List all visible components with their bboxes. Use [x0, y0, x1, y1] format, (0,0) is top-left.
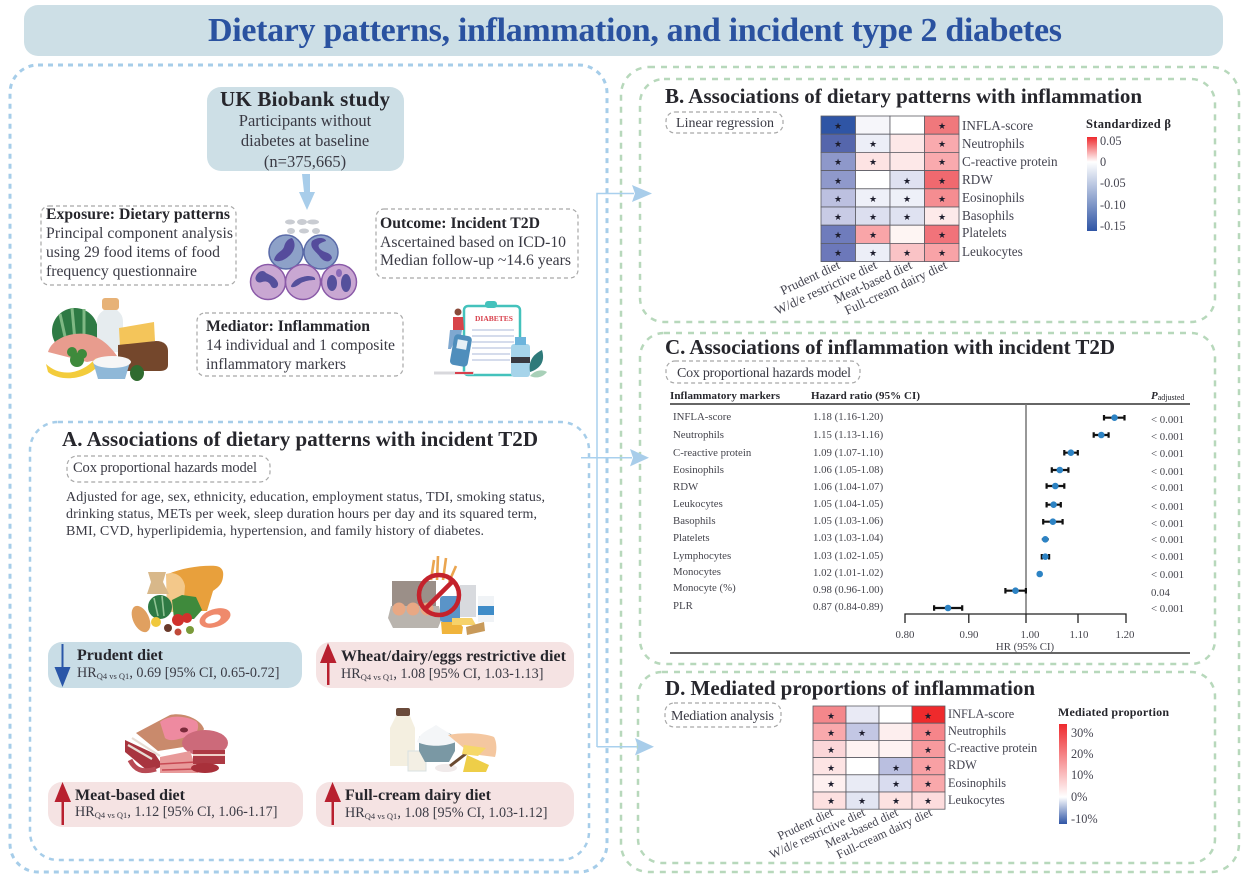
legend: mediated proportion: 0% — [1071, 790, 1087, 804]
icon: meat — [125, 714, 228, 773]
outcome box — [376, 209, 578, 278]
heatmap: mediated proportion: ★ — [924, 763, 932, 773]
marker names: Monocyte (%) — [673, 582, 736, 594]
x axis: 0.80 — [896, 629, 914, 641]
UK Biobank study box: Participants without — [239, 111, 372, 130]
heatmap: standardized beta: ★ — [903, 212, 911, 222]
heatmap: standardized beta: ★ — [834, 157, 842, 167]
model tag: Cox proportional hazards — [666, 361, 860, 383]
legend: standardized beta: 0.05 — [1100, 134, 1122, 148]
heatmap: standardized beta: ★ — [938, 248, 946, 258]
panel: study design — [10, 65, 607, 872]
legend: standardized beta: -0.15 — [1100, 219, 1126, 233]
heatmap: mediated proportion: Prudent diet — [775, 805, 836, 843]
exposure box: using 29 food items of food — [46, 244, 220, 261]
box: prudent diet: HR — [77, 665, 97, 681]
icon: full-cream dairy — [390, 708, 496, 772]
mediator box — [197, 313, 403, 376]
heatmap: standardized beta: ★ — [834, 194, 842, 204]
heatmap: mediated proportion: ★ — [858, 796, 866, 806]
heatmap: standardized beta: ★ — [834, 248, 842, 258]
box: meat-based diet — [48, 782, 303, 827]
heatmap: standardized beta: ★ — [938, 157, 946, 167]
heatmap: standardized beta: INFLA-score — [962, 118, 1033, 133]
UK Biobank study box — [207, 87, 404, 171]
adjusted p values: < 0.001 — [1151, 518, 1184, 530]
model tag: Cox proportional hazards: Cox proportional hazards model — [73, 460, 257, 476]
mediator box: 14 individual and 1 composite — [206, 337, 395, 354]
box: wheat dairy eggs restrictive diet: Wheat/dairy/eggs restrictive diet — [341, 648, 567, 665]
heatmap: mediated proportion: ★ — [827, 745, 835, 755]
marker names: PLR — [673, 600, 694, 612]
heatmap: standardized beta: ★ — [869, 230, 877, 240]
heatmap: standardized beta: Eosinophils — [962, 190, 1024, 205]
heatmap: standardized beta: ★ — [938, 194, 946, 204]
mediator box: Mediator: Inflammation — [206, 318, 370, 335]
adjusted p values: < 0.001 — [1151, 551, 1184, 563]
heatmap: mediated proportion: INFLA-score — [948, 707, 1015, 721]
marker names: C-reactive protein — [673, 447, 752, 459]
forest plot: adjusted — [1158, 393, 1184, 402]
heatmap: standardized beta: Prudent diet — [778, 257, 843, 298]
marker names: Eosinophils — [673, 464, 724, 476]
box: meat-based diet: Q4 vs Q1 — [95, 810, 127, 820]
icon: diabetes clipboard: DIABETES — [475, 314, 513, 323]
icon: restricted wheat dairy eggs with prohibition sign — [388, 556, 494, 635]
heatmap: mediated proportion: ★ — [924, 779, 932, 789]
hazard ratios: 1.03 (1.03-1.04) — [813, 532, 884, 544]
covariate adjustment text: drinking status, METs per week, sleep duration hours per day and its squared term, — [66, 507, 537, 522]
box: wheat dairy eggs restrictive diet: HR — [341, 666, 361, 682]
hazard ratios: 0.98 (0.96-1.00) — [813, 584, 884, 596]
heatmap: standardized beta: ★ — [938, 212, 946, 222]
heatmap: mediated proportion — [767, 706, 1037, 862]
model tag: linear regression — [666, 112, 783, 133]
heatmap: standardized beta: ★ — [834, 121, 842, 131]
box: wheat dairy eggs restrictive diet — [316, 642, 574, 688]
adjusted p values: < 0.001 — [1151, 448, 1184, 460]
heatmap: mediated proportion: ★ — [924, 711, 932, 721]
heatmap: standardized beta: Platelets — [962, 225, 1007, 240]
confidence intervals and point estimates — [934, 414, 1124, 611]
heatmap: mediated proportion: W/d/e restrictive diet — [767, 805, 868, 862]
legend: mediated proportion — [1058, 705, 1169, 826]
forest plot — [670, 390, 1190, 653]
mediator box: inflammatory markers — [206, 356, 346, 373]
hazard ratios: 1.09 (1.07-1.10) — [813, 447, 884, 459]
heatmap: standardized beta: ★ — [938, 139, 946, 149]
panel D: mediated proportions of inflammation — [638, 672, 1215, 863]
heatmap: standardized beta: Full-cream dairy diet — [842, 257, 950, 318]
legend: standardized beta: 0 — [1100, 155, 1106, 169]
marker names: Basophils — [673, 515, 716, 527]
marker names: Neutrophils — [673, 429, 724, 441]
heatmap: mediated proportion: Meat-based diet — [823, 805, 901, 851]
adjusted p values: < 0.001 — [1151, 466, 1184, 478]
outer frame: results panels — [621, 67, 1239, 872]
outcome box: Ascertained based on ICD-10 — [380, 234, 566, 251]
adjusted p values: < 0.001 — [1151, 569, 1184, 581]
heatmap: standardized beta: Leukocytes — [962, 244, 1023, 259]
box: wheat dairy eggs restrictive diet: Q4 vs Q1 — [361, 672, 393, 682]
heatmap: standardized beta: ★ — [903, 194, 911, 204]
heatmap: mediated proportion: ★ — [892, 796, 900, 806]
heatmap: standardized beta: ★ — [869, 194, 877, 204]
panel A: dietary patterns with incident T2D — [30, 422, 589, 860]
arrow: increased risk — [324, 782, 341, 825]
adjusted p values: 0.04 — [1151, 587, 1170, 599]
adjusted p values: < 0.001 — [1151, 534, 1184, 546]
covariate adjustment text: Adjusted for age, sex, ethnicity, education, employment status, TDI, smoking status, — [66, 490, 545, 505]
heatmap: standardized beta: ★ — [938, 230, 946, 240]
model tag: Cox proportional hazards — [67, 456, 270, 482]
heatmap: mediated proportion: ★ — [892, 779, 900, 789]
heatmap: standardized beta: C-reactive protein — [962, 154, 1058, 169]
legend: mediated proportion: Mediated proportion — [1058, 705, 1169, 719]
heatmap: mediated proportion: ★ — [827, 779, 835, 789]
heatmap: standardized beta: Basophils — [962, 208, 1014, 223]
exposure box: Principal component analysis — [46, 225, 233, 242]
adjusted p values: < 0.001 — [1151, 603, 1184, 615]
hazard ratios — [813, 411, 884, 613]
heatmap: standardized beta: Neutrophils — [962, 136, 1024, 151]
title banner: Dietary patterns, inflammation, and incident type 2 diabetes — [208, 12, 1062, 49]
heatmap: standardized beta: RDW — [962, 172, 993, 187]
marker names: Platelets — [673, 532, 710, 544]
heatmap: standardized beta: ★ — [938, 176, 946, 186]
legend: mediated proportion: 30% — [1071, 726, 1094, 740]
heatmap: mediated proportion: Neutrophils — [948, 724, 1006, 738]
box: full-cream dairy diet: HR — [345, 805, 365, 821]
heatmap: standardized beta: ★ — [834, 212, 842, 222]
icon: inflammatory blood cells — [250, 219, 356, 300]
heatmap: standardized beta: ★ — [869, 212, 877, 222]
heading C: C. Associations of inflammation with incident T2D — [665, 335, 1115, 359]
icon: diabetes clipboard — [434, 301, 547, 377]
hazard ratios: 0.87 (0.84-0.89) — [813, 601, 884, 613]
heatmap: standardized beta: ★ — [869, 157, 877, 167]
box: full-cream dairy diet: , 1.08 [95% CI, 1.03-1.12] — [397, 805, 547, 821]
heading D: D. Mediated proportions of inflammation — [665, 676, 1035, 700]
exposure box: frequency questionnaire — [46, 263, 197, 280]
adjusted p values — [1151, 414, 1184, 615]
x axis: 1.00 — [1021, 629, 1039, 641]
box: meat-based diet: , 1.12 [95% CI, 1.06-1.17] — [127, 804, 277, 820]
box: full-cream dairy diet: Full-cream dairy diet — [345, 787, 492, 804]
marker names: RDW — [673, 481, 699, 493]
adjusted p values: < 0.001 — [1151, 501, 1184, 513]
x axis — [896, 614, 1134, 653]
heatmap: standardized beta: ★ — [834, 139, 842, 149]
box: prudent diet: Prudent diet — [77, 647, 164, 664]
heatmap: mediated proportion: RDW — [948, 758, 977, 772]
hazard ratios: 1.15 (1.13-1.16) — [813, 429, 884, 441]
hazard ratios: 1.06 (1.04-1.07) — [813, 481, 884, 493]
hazard ratios: 1.18 (1.16-1.20) — [813, 411, 884, 423]
forest plot: Inflammatory markers — [670, 390, 781, 402]
panel C: inflammation with incident T2D — [640, 333, 1215, 664]
hazard ratios: 1.03 (1.02-1.05) — [813, 550, 884, 562]
legend: mediated proportion: -10% — [1071, 812, 1098, 826]
connector arrows from panel A to panels B, C and D — [581, 185, 654, 755]
legend: mediated proportion: 10% — [1071, 768, 1094, 782]
arrow: increased risk — [320, 643, 336, 685]
heatmap: mediated proportion: ★ — [827, 763, 835, 773]
adjusted p values: < 0.001 — [1151, 482, 1184, 494]
x axis: 1.20 — [1116, 629, 1134, 641]
heatmap: mediated proportion: ★ — [892, 763, 900, 773]
panel B: dietary patterns with inflammation — [640, 79, 1215, 322]
heatmap: standardized beta: ★ — [834, 176, 842, 186]
hazard ratios: 1.05 (1.04-1.05) — [813, 498, 884, 510]
heatmap: mediated proportion: ★ — [924, 728, 932, 738]
hazard ratios: 1.06 (1.05-1.08) — [813, 464, 884, 476]
box: wheat dairy eggs restrictive diet: , 1.08 [95% CI, 1.03-1.13] — [393, 666, 543, 682]
marker names — [673, 411, 752, 612]
exposure box — [41, 206, 236, 285]
heatmap: standardized beta: ★ — [903, 248, 911, 258]
x axis: 1.10 — [1070, 629, 1088, 641]
UK Biobank study box: (n=375,665) — [264, 152, 346, 171]
heatmap: mediated proportion: ★ — [858, 728, 866, 738]
legend: standardized beta: Standardized β — [1086, 117, 1171, 131]
heatmap: mediated proportion: Eosinophils — [948, 776, 1006, 790]
covariate adjustment text — [66, 490, 545, 539]
legend: standardized beta — [1086, 117, 1171, 233]
x axis: 0.90 — [960, 629, 978, 641]
heatmap: standardized beta — [772, 116, 1058, 318]
box: full-cream dairy diet — [316, 782, 574, 827]
arrow: decreased risk — [54, 644, 70, 687]
heatmap: standardized beta: ★ — [869, 248, 877, 258]
covariate adjustment text: BMI, CVD, hyperlipidemia, hypertension, and family history of diabetes. — [66, 524, 484, 539]
box: full-cream dairy diet: Q4 vs Q1 — [365, 811, 397, 821]
heatmap: mediated proportion: Full-cream dairy diet — [834, 805, 935, 862]
arrow: increased risk — [54, 782, 71, 825]
UK Biobank study box: diabetes at baseline — [241, 131, 369, 150]
heatmap: mediated proportion: ★ — [827, 796, 835, 806]
outcome box: Outcome: Incident T2D — [380, 215, 540, 232]
forest plot: P — [1151, 390, 1158, 402]
model tag: mediation analysis — [665, 703, 781, 727]
heatmap: standardized beta: Meat-based diet — [831, 257, 915, 306]
outcome box: Median follow-up ~14.6 years — [380, 252, 571, 269]
x axis: HR (95% CI) — [996, 641, 1054, 653]
model tag: Cox proportional hazards: Cox proportional hazards model — [677, 366, 851, 381]
heatmap: standardized beta: ★ — [834, 230, 842, 240]
heatmap: mediated proportion: ★ — [924, 745, 932, 755]
marker names: Lymphocytes — [673, 550, 731, 562]
marker names: Leukocytes — [673, 498, 723, 510]
marker names: Monocytes — [673, 566, 721, 578]
adjusted p values: < 0.001 — [1151, 414, 1184, 426]
legend: standardized beta: -0.05 — [1100, 176, 1126, 190]
icon: mixed food — [46, 298, 168, 381]
heatmap: mediated proportion: ★ — [924, 796, 932, 806]
arrow: study to inflammation — [299, 174, 315, 210]
heatmap: mediated proportion: ★ — [827, 728, 835, 738]
legend: standardized beta: -0.10 — [1100, 198, 1126, 212]
box: meat-based diet: Meat-based diet — [75, 787, 186, 804]
forest plot: Hazard ratio (95% CI) — [811, 390, 920, 402]
box: prudent diet: , 0.69 [95% CI, 0.65-0.72] — [129, 665, 279, 681]
heading A: A. Associations of dietary patterns with incident T2D — [62, 427, 538, 451]
hazard ratios: 1.05 (1.03-1.06) — [813, 515, 884, 527]
marker names: INFLA-score — [673, 411, 731, 423]
box: meat-based diet: HR — [75, 804, 95, 820]
title banner — [24, 5, 1223, 56]
legend: mediated proportion: 20% — [1071, 747, 1094, 761]
adjusted p values: < 0.001 — [1151, 431, 1184, 443]
heatmap: mediated proportion: C-reactive protein — [948, 741, 1037, 755]
model tag: mediation analysis: Mediation analysis — [671, 709, 774, 724]
heatmap: standardized beta: W/d/e restrictive diet — [772, 257, 880, 318]
heatmap: standardized beta: ★ — [938, 121, 946, 131]
heatmap: standardized beta: ★ — [903, 176, 911, 186]
heading B: B. Associations of dietary patterns with inflammation — [665, 84, 1142, 108]
hazard ratios: 1.02 (1.01-1.02) — [813, 567, 884, 579]
model tag: linear regression: Linear regression — [676, 116, 774, 131]
icon: prudent diet foods — [128, 566, 233, 636]
heatmap: mediated proportion: Leukocytes — [948, 793, 1005, 807]
box: prudent diet: Q4 vs Q1 — [97, 671, 129, 681]
exposure box: Exposure: Dietary patterns — [46, 206, 230, 223]
box: prudent diet — [48, 642, 302, 688]
heatmap: mediated proportion: ★ — [827, 711, 835, 721]
heatmap: standardized beta: ★ — [869, 139, 877, 149]
UK Biobank study box: UK Biobank study — [220, 87, 390, 111]
